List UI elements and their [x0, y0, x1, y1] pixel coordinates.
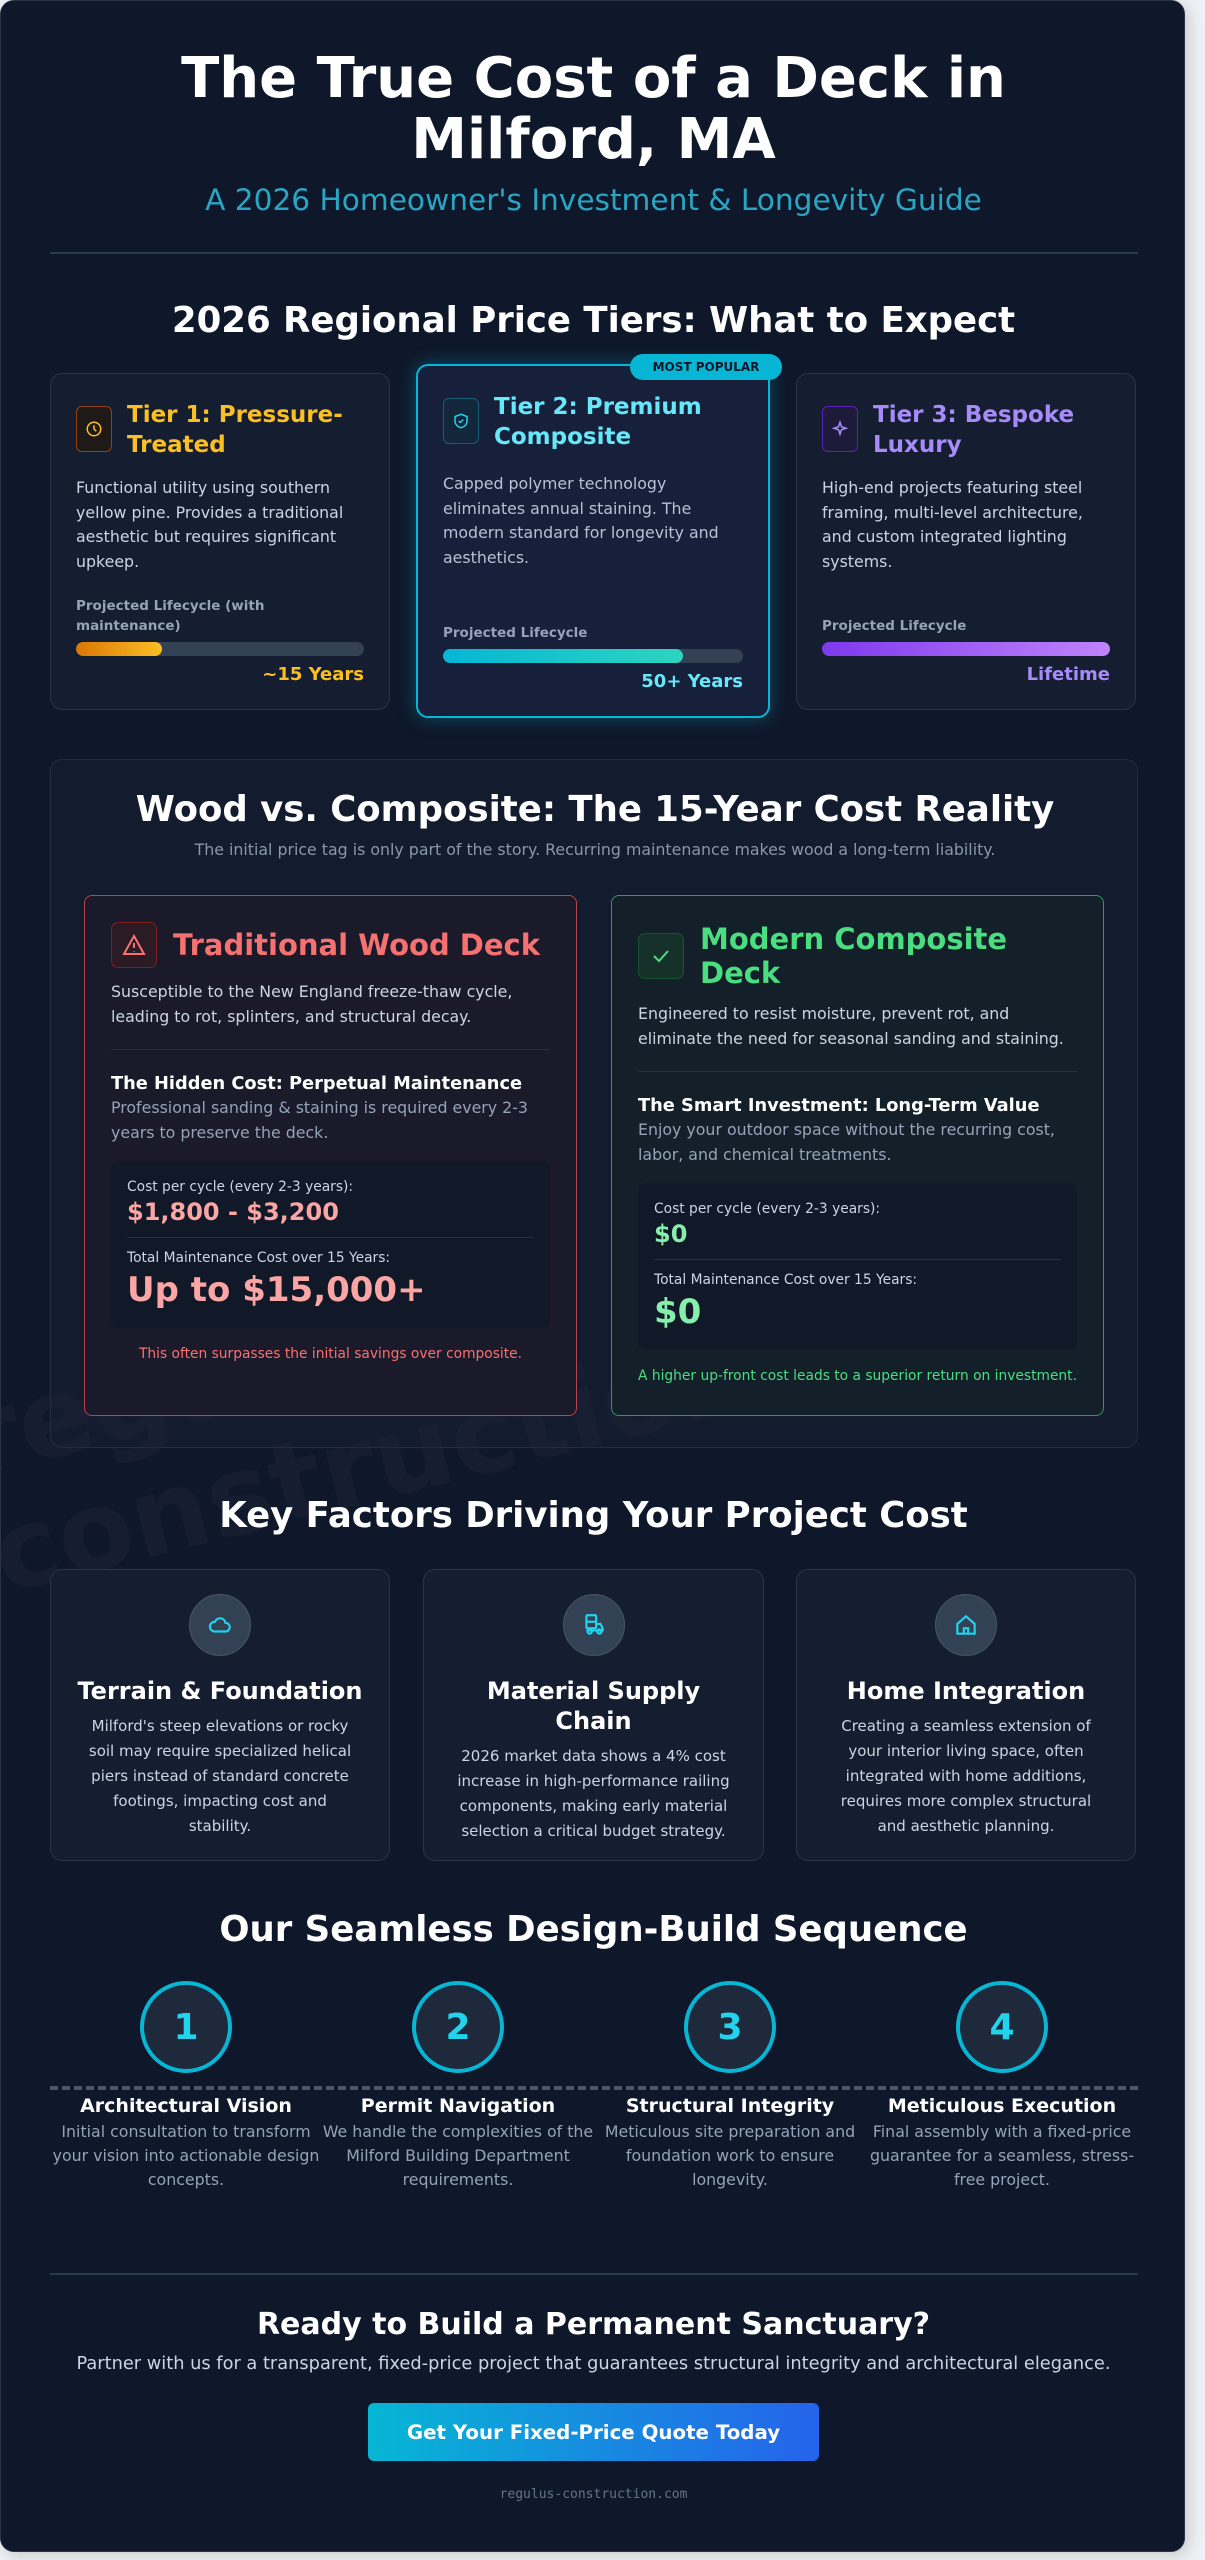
- heading: design-build sequence: Our Seamless Design-Build Sequence: [219, 1909, 968, 1950]
- panel: home integration: [796, 1569, 1136, 1861]
- composite cost box: [638, 1183, 1077, 1350]
- step 1: Initial consultation to transform your vision into actionable design concepts.: [53, 2122, 319, 2189]
- panel: traditional wood deck: [84, 895, 577, 1416]
- wood header: Traditional Wood Deck: [173, 928, 540, 962]
- icon: house: [935, 1594, 997, 1656]
- tier 1 description: Functional utility using southern yellow pine. Provides a traditional aesthetic but requires significant upkeep.: [76, 478, 343, 570]
- CTA heading: Ready to Build a Permanent Sanctuary?: [257, 2307, 930, 2342]
- tier 1 header: Tier 1: Pressure-Treated: [127, 402, 343, 458]
- tier 2 description: Capped polymer technology eliminates annual staining. The modern standard for longevity and aesthetics.: [443, 474, 719, 566]
- composite header: Modern Composite Deck: [700, 922, 1007, 990]
- step 2: Permit Navigation: [361, 2095, 555, 2117]
- composite note: A higher up-front cost leads to a superior return on investment.: [638, 1368, 1077, 1384]
- tier 2 header: Tier 2: Premium Composite: [494, 394, 702, 450]
- step 3: [605, 1981, 855, 2189]
- heading: price tiers: 2026 Regional Price Tiers: What to Expect: [172, 300, 1015, 341]
- subtitle: A 2026 Homeowner's Investment & Longevity Guide: [205, 183, 982, 217]
- composite cost box: $0: [654, 1292, 701, 1332]
- step 1: Architectural Vision: [80, 2095, 292, 2117]
- step 4: Meticulous Execution: [888, 2095, 1116, 2117]
- tier 2 lifecycle bar: 50+ Years: [641, 671, 743, 692]
- wood cost box: $1,800 - $3,200: [127, 1198, 339, 1226]
- tier 1 lifecycle bar: ~15 Years: [262, 664, 364, 685]
- heading: wood vs composite: Wood vs. Composite: The 15-Year Cost Reality: [136, 789, 1054, 830]
- step 2: We handle the complexities of the Milford Building Department requirements.: [323, 2122, 593, 2189]
- panel: wood vs composite: [50, 759, 1138, 1448]
- panel: terrain & foundation: Terrain & Foundation: [77, 1677, 362, 1705]
- tier 1 lifecycle bar: Projected Lifecycle (with maintenance): [76, 598, 264, 634]
- watermark: construction.com: [0, 1234, 1055, 1619]
- title: [181, 46, 1006, 172]
- tier 3 header: Tier 3: Bespoke Luxury: [873, 402, 1074, 458]
- tier 3 description: High-end projects featuring steel framing, multi-level architecture, and custom integrated lighting systems.: [822, 478, 1083, 570]
- hidden cost text: The Hidden Cost: Perpetual Maintenance: [111, 1073, 522, 1094]
- step 1: 1: [173, 2006, 199, 2048]
- title: The True Cost of a Deck in: [181, 46, 1006, 111]
- icon: truck: [562, 1594, 624, 1656]
- icon: cloud: [189, 1594, 251, 1656]
- step 4: Final assembly with a fixed-price guarantee for a seamless, stress-free project.: [870, 2122, 1134, 2189]
- badge: most popular: MOST POPULAR: [653, 360, 759, 374]
- step 4: 4: [989, 2006, 1015, 2048]
- title: Milford, MA: [411, 107, 776, 172]
- composite description: Engineered to resist moisture, prevent rot, and eliminate the need for seasonal sanding and staining.: [638, 1004, 1064, 1048]
- wood note: This often surpasses the initial savings over composite.: [139, 1346, 522, 1362]
- watermark: [0, 1067, 1205, 1615]
- panel: tier 1: [50, 373, 390, 710]
- composite cost box: $0: [654, 1220, 687, 1248]
- step 3: Structural Integrity: [626, 2095, 834, 2117]
- step 3: Meticulous site preparation and foundation work to ensure longevity.: [605, 2122, 855, 2189]
- panel: tier 2: [416, 364, 770, 718]
- CTA button: Get Your Fixed-Price Quote Today: [407, 2420, 780, 2444]
- panel: home integration: Home Integration: [847, 1677, 1085, 1705]
- step 1: [53, 1981, 319, 2189]
- wood description: Susceptible to the New England freeze-thaw cycle, leading to rot, splinters, and structural decay.: [111, 982, 512, 1026]
- panel: material supply chain: [423, 1569, 764, 1861]
- step 2: [323, 1981, 593, 2189]
- heading: key factors: Key Factors Driving Your Project Cost: [219, 1495, 968, 1536]
- CTA text: Partner with us for a transparent, fixed-price project that guarantees structural integrity and architectural elegance.: [76, 2353, 1111, 2374]
- panel: terrain & foundation: [50, 1569, 390, 1861]
- tier 2 lifecycle bar: [443, 625, 743, 692]
- composite cost box: Total Maintenance Cost over 15 Years:: [654, 1272, 917, 1288]
- wood cost box: Cost per cycle (every 2-3 years):: [127, 1179, 353, 1195]
- panel: traditional wood deck: Professional sanding & staining is required every 2-3 years to preserve the deck.: [111, 1098, 528, 1142]
- panel: terrain & foundation: Milford's steep elevations or rocky soil may require specialized helical piers instead of standard concrete footings, impacting cost and stability.: [89, 1717, 351, 1835]
- subheading: The initial price tag is only part of the story. Recurring maintenance makes wood a long-term liability.: [195, 840, 995, 859]
- smart investment text: The Smart Investment: Long-Term Value: [638, 1095, 1040, 1116]
- badge: most popular: [630, 354, 782, 380]
- panel: material supply chain: 2026 market data shows a 4% cost increase in high-performance railing components, making early material selection a critical budget strategy.: [457, 1747, 730, 1840]
- tier 2 lifecycle bar: Projected Lifecycle: [443, 625, 587, 641]
- panel: modern composite deck: [611, 895, 1104, 1416]
- tier 3 lifecycle bar: [822, 618, 1110, 685]
- CTA button: [368, 2403, 819, 2461]
- tier 3 lifecycle bar: Projected Lifecycle: [822, 618, 966, 634]
- step 2: 2: [445, 2006, 471, 2048]
- wood cost box: [111, 1161, 550, 1328]
- wood cost box: Total Maintenance Cost over 15 Years:: [127, 1250, 390, 1266]
- footer url: regulus-construction.com: [500, 2487, 687, 2502]
- panel: home integration: Creating a seamless extension of your interior living space, often integrated with home additions, requires more complex structural and aesthetic planning.: [841, 1717, 1091, 1835]
- step 3: 3: [717, 2006, 743, 2048]
- wood header: [111, 922, 540, 968]
- panel: material supply chain: Material Supply Chain: [487, 1677, 700, 1735]
- tier 3 lifecycle bar: Lifetime: [1027, 664, 1110, 685]
- panel: tier 3: [796, 373, 1136, 710]
- panel: modern composite deck: Enjoy your outdoor space without the recurring cost, labor, and chemical treatments.: [638, 1120, 1055, 1164]
- wood cost box: Up to $15,000+: [127, 1270, 426, 1310]
- step 4: [870, 1981, 1134, 2189]
- composite cost box: Cost per cycle (every 2-3 years):: [654, 1201, 880, 1217]
- tier 1 lifecycle bar: [76, 598, 364, 685]
